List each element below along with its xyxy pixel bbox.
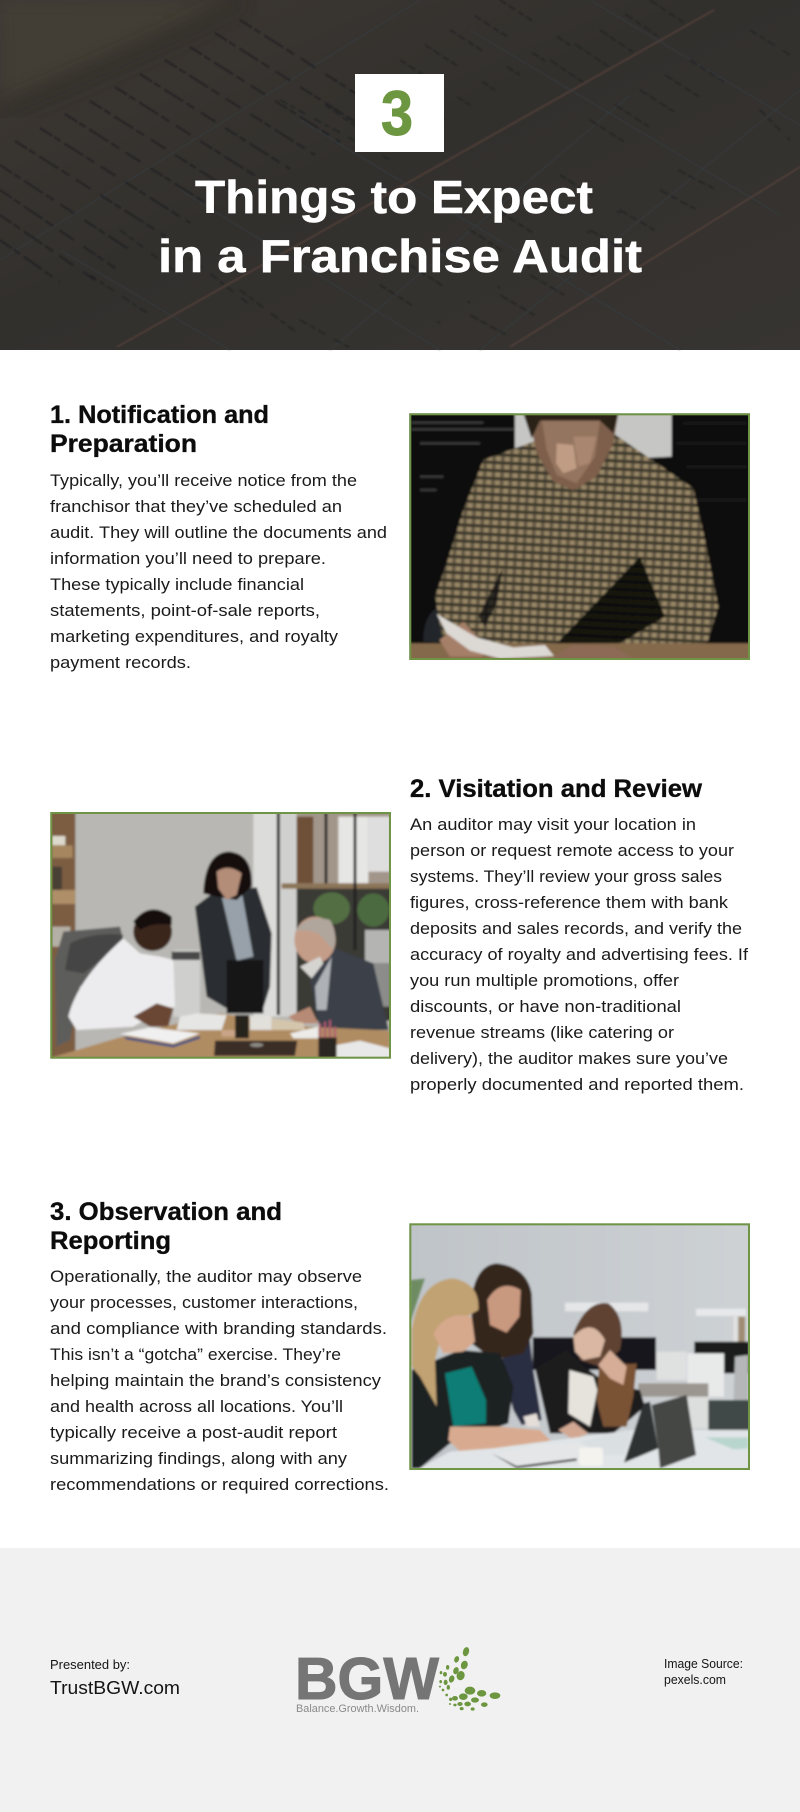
- title: Things to Expect: [195, 171, 593, 223]
- title: [158, 171, 642, 282]
- header banner: ledger photo with title: [0, 0, 800, 350]
- body text: step 1: These typically include financial: [50, 575, 304, 594]
- footer panel: [0, 1548, 800, 1812]
- body text: step 2: [410, 815, 748, 1094]
- photo: man reading document: [400, 400, 767, 667]
- body text: step 3: and compliance with branding standards.: [50, 1319, 387, 1338]
- body text: step 2: accuracy of royalty and advertising fees. If: [410, 945, 748, 964]
- body text: step 2: properly documented and reported them.: [410, 1075, 744, 1094]
- heading: step 3: 3. Observation and: [50, 1198, 282, 1226]
- body text: step 1: statements, point-of-sale reports,: [50, 601, 320, 620]
- background photo: handwritten ledger: [0, 0, 800, 350]
- body text: step 2: deposits and sales records, and verify the: [410, 919, 742, 938]
- heading: step 2: 2. Visitation and Review: [410, 775, 703, 803]
- body text: step 2: revenue streams (like catering or: [410, 1023, 674, 1042]
- body text: step 2: person or request remote access to your: [410, 841, 734, 860]
- presented by: [50, 1657, 180, 1698]
- body text: step 1: Typically, you’ll receive notice from the: [50, 471, 357, 490]
- body text: step 3: summarizing findings, along with any: [50, 1449, 348, 1468]
- body text: step 2: you run multiple promotions, offer: [410, 971, 679, 990]
- panel: step 2 visitation and review: [40, 775, 748, 1094]
- body text: step 3: your processes, customer interactions,: [50, 1293, 358, 1312]
- logo: BGW: BGW: [295, 1646, 439, 1712]
- image source: [664, 1656, 743, 1687]
- heading: step 1: 1. Notification and: [50, 401, 269, 429]
- photo: three colleagues at a desk: [40, 800, 407, 1067]
- body text: step 3: helping maintain the brand’s consistency: [50, 1371, 382, 1390]
- icon: green leaf dots: [439, 1646, 500, 1711]
- body text: step 3: recommendations or required corrections.: [50, 1475, 389, 1494]
- body text: step 1: payment records.: [50, 653, 191, 672]
- body text: step 1: information you’ll need to prepare.: [50, 549, 326, 568]
- badge: number 3: 3: [381, 79, 413, 149]
- body text: step 3: This isn’t a “gotcha” exercise. They’re: [50, 1345, 341, 1364]
- body text: step 2: discounts, or have non-traditional: [410, 997, 681, 1016]
- body text: step 1: audit. They will outline the documents and: [50, 523, 387, 542]
- image source: pexels.com: [664, 1672, 726, 1687]
- body text: step 1: marketing expenditures, and royalty: [50, 627, 339, 646]
- body text: step 3: [50, 1267, 389, 1494]
- badge: number 3: [355, 74, 444, 152]
- presented by: Presented by:: [50, 1657, 130, 1672]
- body text: step 3: Operationally, the auditor may observe: [50, 1267, 362, 1286]
- body text: step 2: figures, cross-reference them with bank: [410, 893, 729, 912]
- presented by: TrustBGW.com: [50, 1678, 180, 1698]
- heading: step 1: Preparation: [50, 430, 197, 458]
- heading: step 1: [50, 401, 269, 458]
- photo: three women reviewing documents: [400, 1210, 767, 1477]
- body text: step 1: [50, 471, 387, 672]
- image source: Image Source:: [664, 1656, 743, 1671]
- logo: BGW: [295, 1646, 500, 1715]
- body text: step 1: franchisor that they’ve scheduled an: [50, 497, 342, 516]
- panel: step 1 notification and preparation: [50, 400, 767, 672]
- body text: step 2: delivery), the auditor makes sure you’ve: [410, 1049, 728, 1068]
- logo: BGW: Balance.Growth.Wisdom.: [296, 1703, 419, 1715]
- title: in a Franchise Audit: [158, 230, 642, 282]
- panel: step 3 observation and reporting: [50, 1198, 767, 1494]
- heading: step 3: [50, 1198, 282, 1255]
- body text: step 3: typically receive a post-audit report: [50, 1423, 337, 1442]
- heading: step 3: Reporting: [50, 1227, 171, 1255]
- body text: step 2: systems. They’ll review your gross sales: [410, 867, 722, 886]
- body text: step 3: and health across all locations. You’ll: [50, 1397, 343, 1416]
- body text: step 2: An auditor may visit your location in: [410, 815, 696, 834]
